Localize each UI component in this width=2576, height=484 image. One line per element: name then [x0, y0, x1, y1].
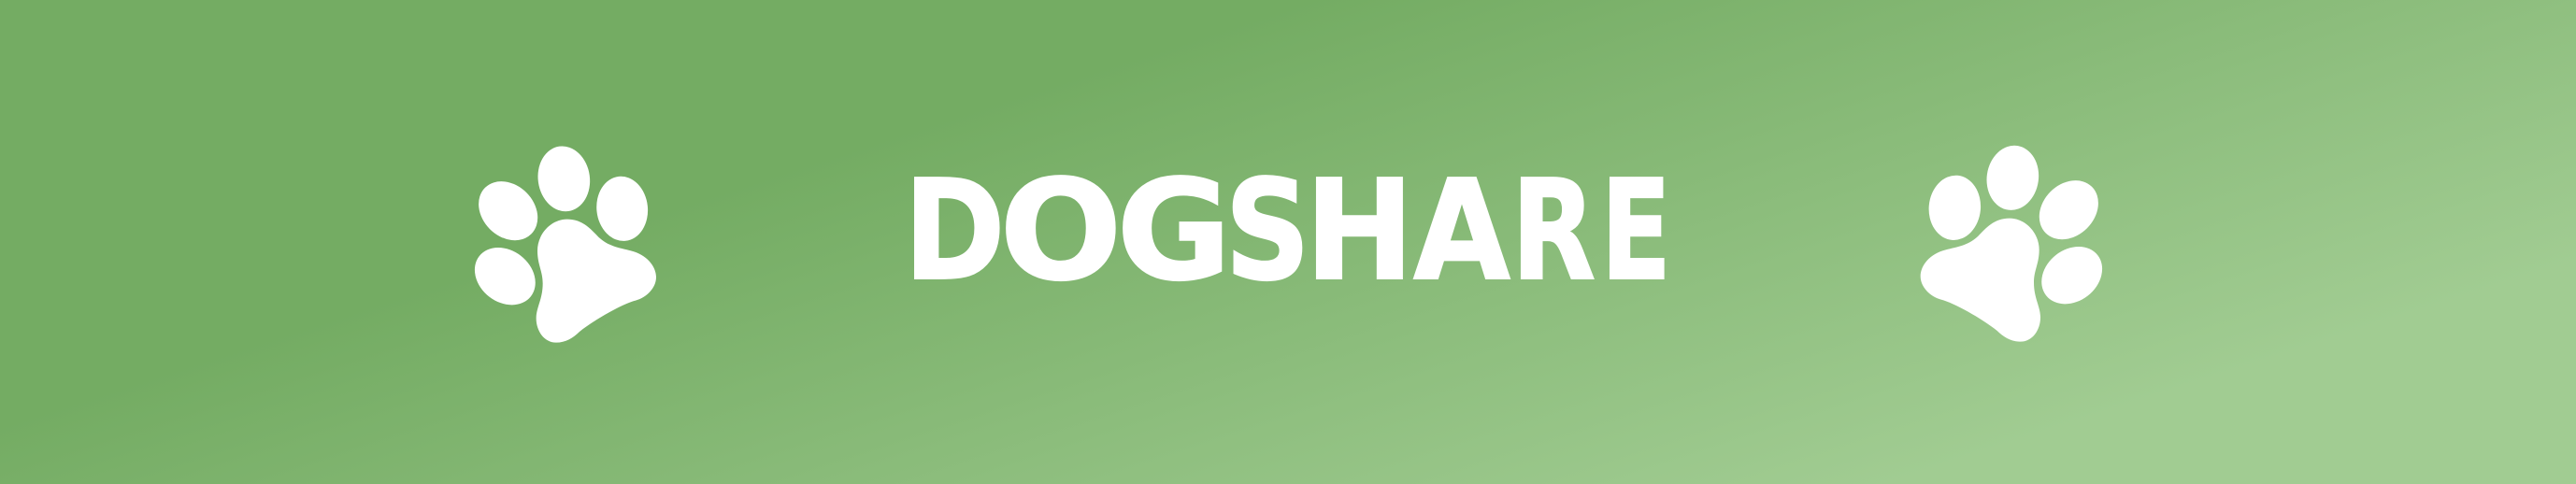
title: DOGSHARE: H — [1305, 150, 1414, 311]
icon: right paw print — [1920, 146, 2103, 342]
icon: left paw print — [475, 146, 656, 343]
title: DOGSHARE: R — [1511, 150, 1596, 311]
title: DOGSHARE — [904, 150, 1671, 311]
title: DOGSHARE: D — [904, 150, 1006, 311]
title: DOGSHARE: E — [1601, 150, 1671, 311]
title: DOGSHARE: O — [1000, 150, 1122, 311]
title: DOGSHARE: S — [1224, 150, 1310, 311]
title: DOGSHARE: G — [1117, 150, 1231, 311]
title: DOGSHARE: A — [1413, 150, 1510, 311]
